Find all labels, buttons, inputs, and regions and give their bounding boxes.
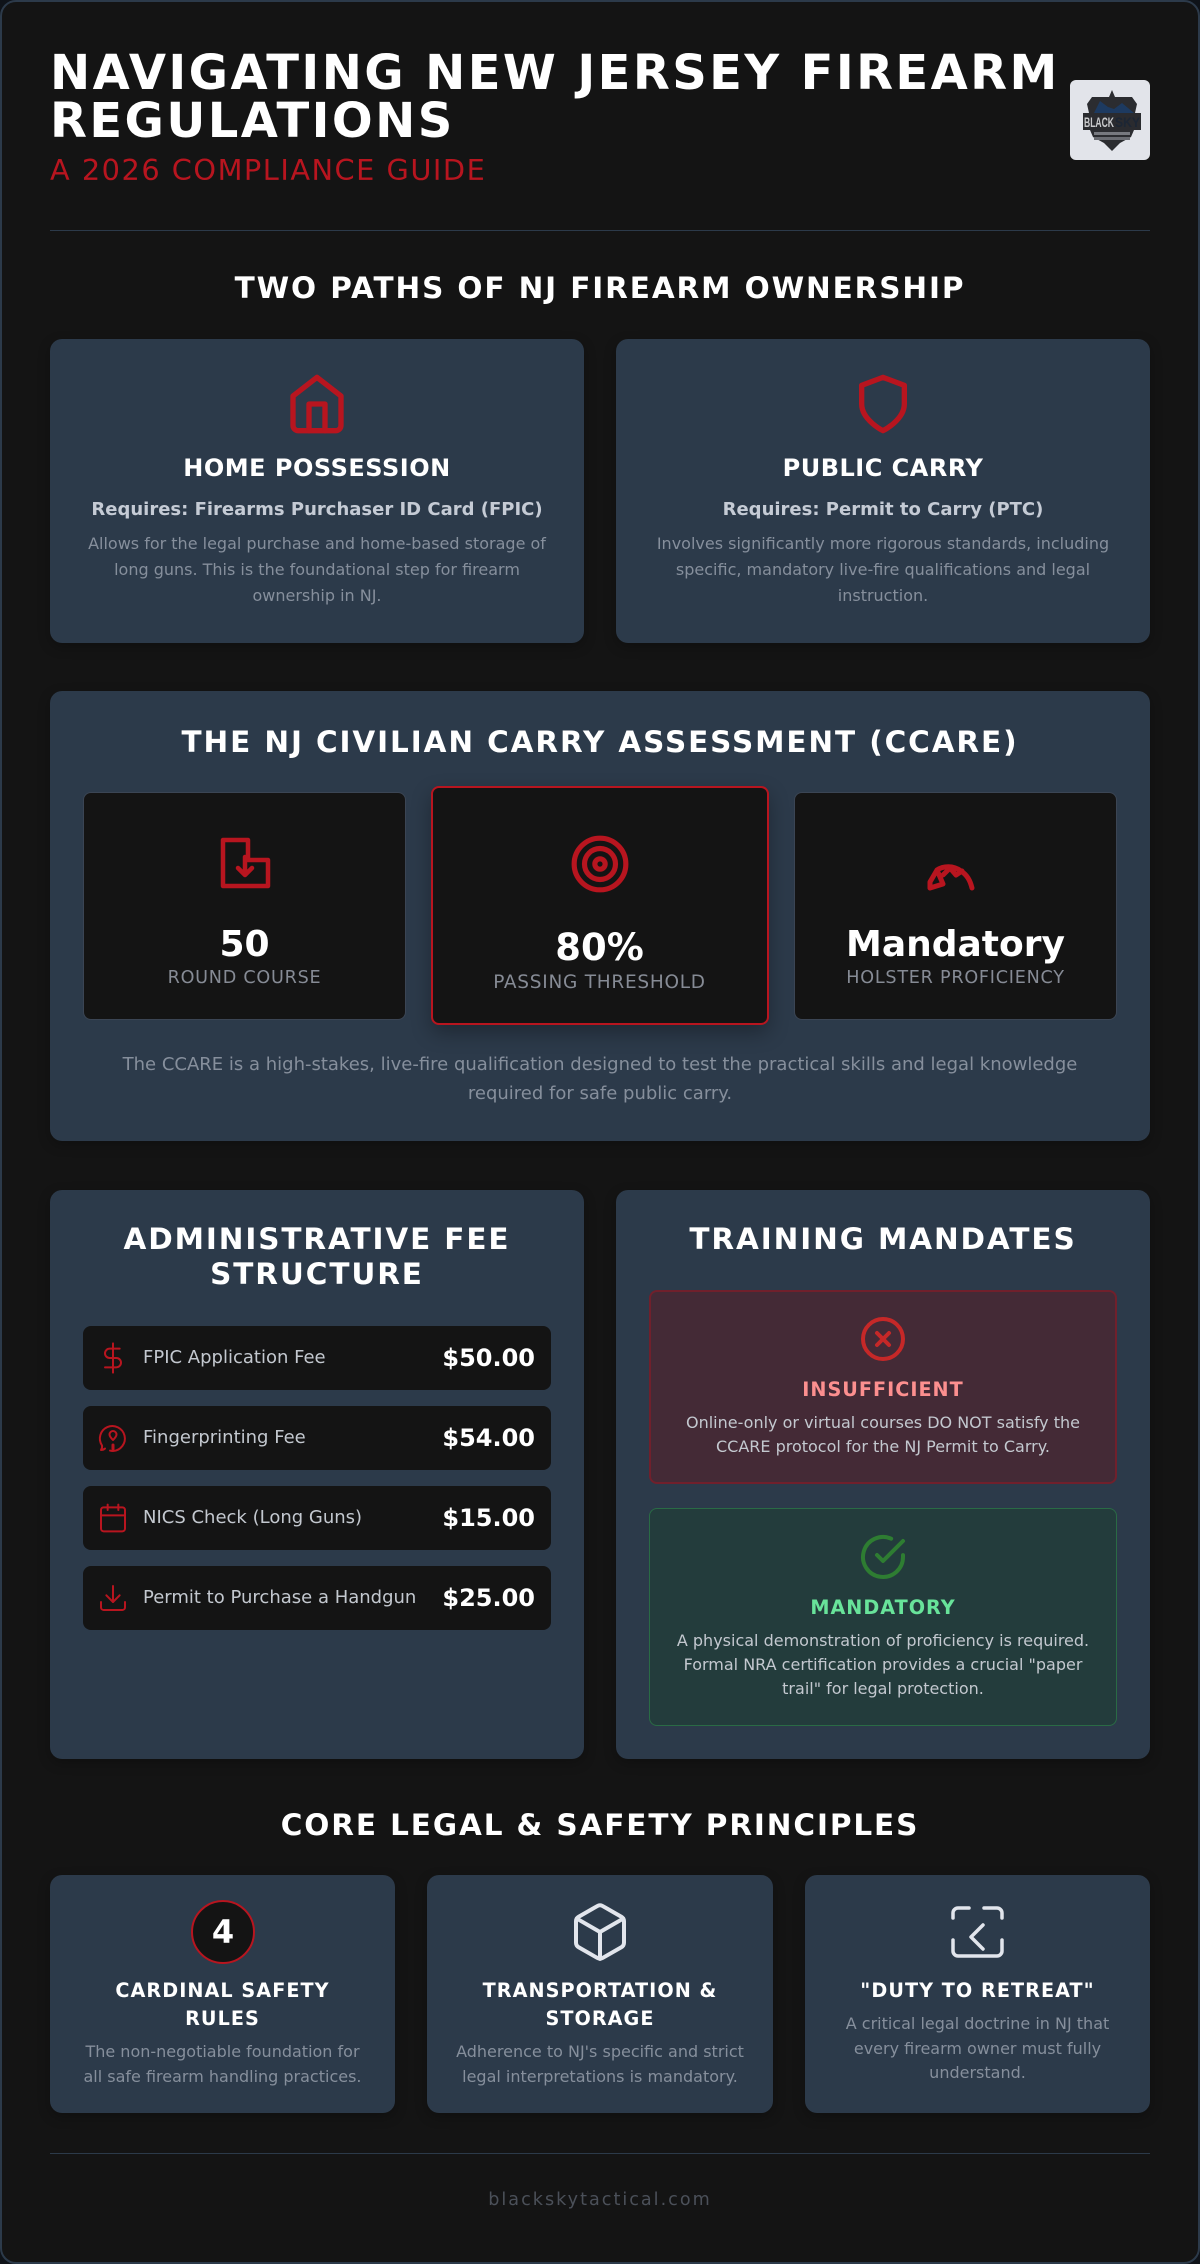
requirement: Requires: Firearms Purchaser ID Card (FPIC) bbox=[91, 499, 543, 520]
icon: shield bbox=[859, 374, 907, 434]
icon: retreat frame bbox=[951, 1906, 1004, 1958]
icon: check circle bbox=[861, 1534, 905, 1579]
stat: 80% passing threshold bbox=[430, 786, 768, 1025]
heading: home possession: HOME POSSESSION bbox=[183, 454, 451, 482]
heading: CARDINAL SAFETY bbox=[115, 1979, 330, 2002]
description: Formal NRA certification provides a crucial "paper bbox=[684, 1655, 1082, 1674]
price: $15.00 bbox=[442, 1504, 535, 1532]
description: trail" for legal protection. bbox=[782, 1679, 984, 1698]
logo badge: SKY bbox=[1115, 114, 1141, 130]
description: Adherence to NJ's specific and strict bbox=[456, 2042, 744, 2061]
heading: CCARE: THE NJ CIVILIAN CARRY ASSESSMENT (CCARE) bbox=[182, 725, 1018, 759]
panel: public carry bbox=[616, 339, 1150, 643]
panel: home possession bbox=[50, 339, 584, 643]
callout: insufficient bbox=[649, 1290, 1117, 1484]
footer: blackskytactical.com bbox=[488, 2190, 712, 2210]
logo badge bbox=[1070, 80, 1150, 160]
description: every firearm owner must fully bbox=[854, 2038, 1101, 2058]
stat: mandatory holster proficiency bbox=[794, 792, 1117, 1020]
value: mandatory: Mandatory bbox=[846, 924, 1065, 965]
logo badge: BLACK bbox=[1084, 114, 1114, 130]
description: instruction. bbox=[838, 586, 928, 605]
icon: number 4 badge: 4 bbox=[212, 1913, 234, 1951]
heading bbox=[115, 1979, 330, 2030]
heading: fees: STRUCTURE bbox=[210, 1257, 424, 1291]
description bbox=[657, 534, 1109, 605]
description: legal interpretations is mandatory. bbox=[462, 2066, 738, 2086]
value: 80%: 80% bbox=[555, 926, 644, 969]
icon: course bbox=[220, 838, 270, 888]
description bbox=[83, 2042, 362, 2086]
label: FPIC Application Fee bbox=[143, 1347, 326, 1368]
icon: package bbox=[574, 1903, 626, 1961]
heading: TRANSPORTATION & bbox=[483, 1979, 717, 2002]
description: long guns. This is the foundational step for firearm bbox=[114, 560, 520, 579]
heading: core principles: CORE LEGAL & SAFETY PRINCIPLES bbox=[281, 1808, 919, 1842]
heading: RULES bbox=[185, 2007, 260, 2030]
icon: x circle bbox=[861, 1317, 905, 1361]
description: understand. bbox=[929, 2063, 1026, 2082]
description: A critical legal doctrine in NJ that bbox=[846, 2014, 1109, 2033]
description: Online-only or virtual courses DO NOT satisfy the bbox=[686, 1413, 1080, 1432]
panel: cardinal safety rules bbox=[50, 1875, 395, 2113]
label: round course: ROUND COURSE bbox=[168, 968, 321, 988]
icon: download bbox=[100, 1585, 126, 1611]
heading: fees bbox=[124, 1222, 510, 1291]
description bbox=[122, 1054, 1077, 1104]
label: Permit to Purchase a Handgun bbox=[143, 1587, 416, 1608]
fee row: NICS check bbox=[83, 1486, 551, 1550]
subtitle: A 2026 COMPLIANCE GUIDE bbox=[50, 153, 486, 187]
label: NICS Check (Long Guns) bbox=[143, 1507, 362, 1528]
heading: STORAGE bbox=[545, 2007, 655, 2030]
description: CCARE protocol for the NJ Permit to Carry. bbox=[716, 1437, 1050, 1456]
price: $54.00 bbox=[442, 1424, 535, 1452]
callout: mandatory bbox=[649, 1508, 1117, 1726]
title bbox=[50, 45, 1060, 149]
heading: two paths: TWO PATHS OF NJ FIREARM OWNERSHIP bbox=[235, 271, 965, 305]
price: $25.00 bbox=[442, 1584, 535, 1612]
title: NAVIGATING NEW JERSEY FIREARM bbox=[50, 45, 1060, 101]
heading: mandatory: MANDATORY bbox=[810, 1596, 956, 1619]
description: The non-negotiable foundation for bbox=[85, 2042, 360, 2061]
fee row: permit to purchase bbox=[83, 1566, 551, 1630]
description bbox=[88, 534, 546, 605]
icon: target bbox=[572, 836, 628, 892]
heading: public carry: PUBLIC CARRY bbox=[783, 454, 983, 482]
label: passing threshold: PASSING THRESHOLD bbox=[493, 972, 706, 993]
description bbox=[686, 1413, 1080, 1456]
stat: 50 round course bbox=[83, 792, 406, 1020]
panel: transportation and storage bbox=[427, 1875, 773, 2113]
label: holster proficiency: HOLSTER PROFICIENCY bbox=[846, 968, 1065, 988]
icon: fingerprint badge bbox=[98, 1425, 126, 1452]
panel: training mandates bbox=[616, 1190, 1150, 1759]
heading: fees: ADMINISTRATIVE FEE bbox=[124, 1222, 510, 1256]
requirement: Requires: Permit to Carry (PTC) bbox=[723, 499, 1043, 520]
description bbox=[846, 2014, 1109, 2082]
icon: number 4 badge bbox=[191, 1900, 255, 1964]
heading: training: TRAINING MANDATES bbox=[689, 1222, 1077, 1256]
icon: holster bbox=[928, 864, 974, 890]
price: $50.00 bbox=[442, 1344, 535, 1372]
description: Involves significantly more rigorous standards, including bbox=[657, 534, 1109, 553]
description: required for safe public carry. bbox=[468, 1083, 732, 1104]
icon: home bbox=[290, 374, 344, 434]
title: REGULATIONS bbox=[50, 93, 455, 149]
description: The CCARE is a high-stakes, live-fire qualification designed to test the practical skills and legal knowledge bbox=[123, 1054, 1077, 1075]
heading: "DUTY TO RETREAT" bbox=[860, 1979, 1095, 2002]
icon: dollar bbox=[104, 1342, 122, 1374]
heading bbox=[482, 1979, 717, 2030]
icon: calendar bbox=[100, 1504, 126, 1532]
description bbox=[677, 1631, 1089, 1698]
description: ownership in NJ. bbox=[252, 586, 382, 605]
description: Allows for the legal purchase and home-based storage of bbox=[88, 534, 546, 553]
fee row: FPIC application bbox=[83, 1326, 551, 1390]
description: all safe firearm handling practices. bbox=[83, 2066, 362, 2086]
panel: administrative fee structure bbox=[50, 1190, 584, 1759]
description: A physical demonstration of proficiency is required. bbox=[677, 1631, 1089, 1650]
value: 50: 50 bbox=[219, 924, 270, 965]
fee row: fingerprinting bbox=[83, 1406, 551, 1470]
description: specific, mandatory live-fire qualifications and legal bbox=[676, 560, 1090, 579]
panel: duty to retreat bbox=[805, 1875, 1150, 2113]
panel: CCARE assessment bbox=[50, 691, 1150, 1141]
heading: insufficient: INSUFFICIENT bbox=[802, 1378, 964, 1401]
label: Fingerprinting Fee bbox=[143, 1427, 306, 1448]
description bbox=[456, 2042, 744, 2086]
